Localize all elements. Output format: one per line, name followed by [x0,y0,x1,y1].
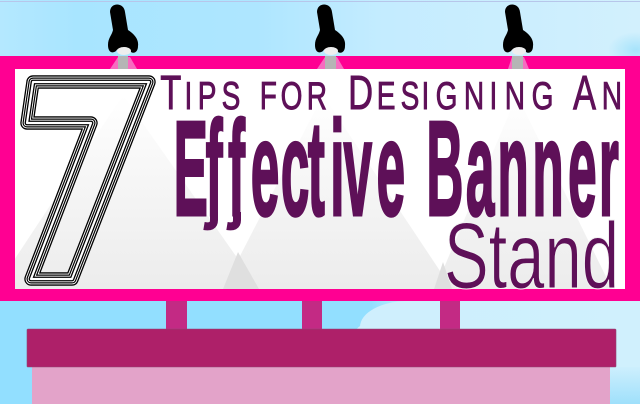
numeral 7 [27,82,149,279]
lamp 3 [503,4,533,69]
magenta ledge [27,329,616,367]
title line: tips for designing an: TIPS [160,65,240,119]
lamp 1 [108,4,138,69]
title line: tips for designing an [160,65,622,119]
title line: tips for designing an: AN [573,65,622,119]
decorative flourish under the f letters [204,212,237,226]
billboard panel [0,69,625,289]
lamp 2 [315,4,345,69]
title line: tips for designing an: DESIGNING [348,65,553,119]
title line: tips for designing an: FOR [260,75,327,118]
lower pink wall [32,367,610,404]
title line: effective banner: Effective [174,93,405,244]
title line: effective banner: Banner [426,93,619,244]
billboard frame [0,56,640,301]
title line: effective banner [174,93,619,244]
cloud [356,301,456,353]
support posts [166,301,460,330]
